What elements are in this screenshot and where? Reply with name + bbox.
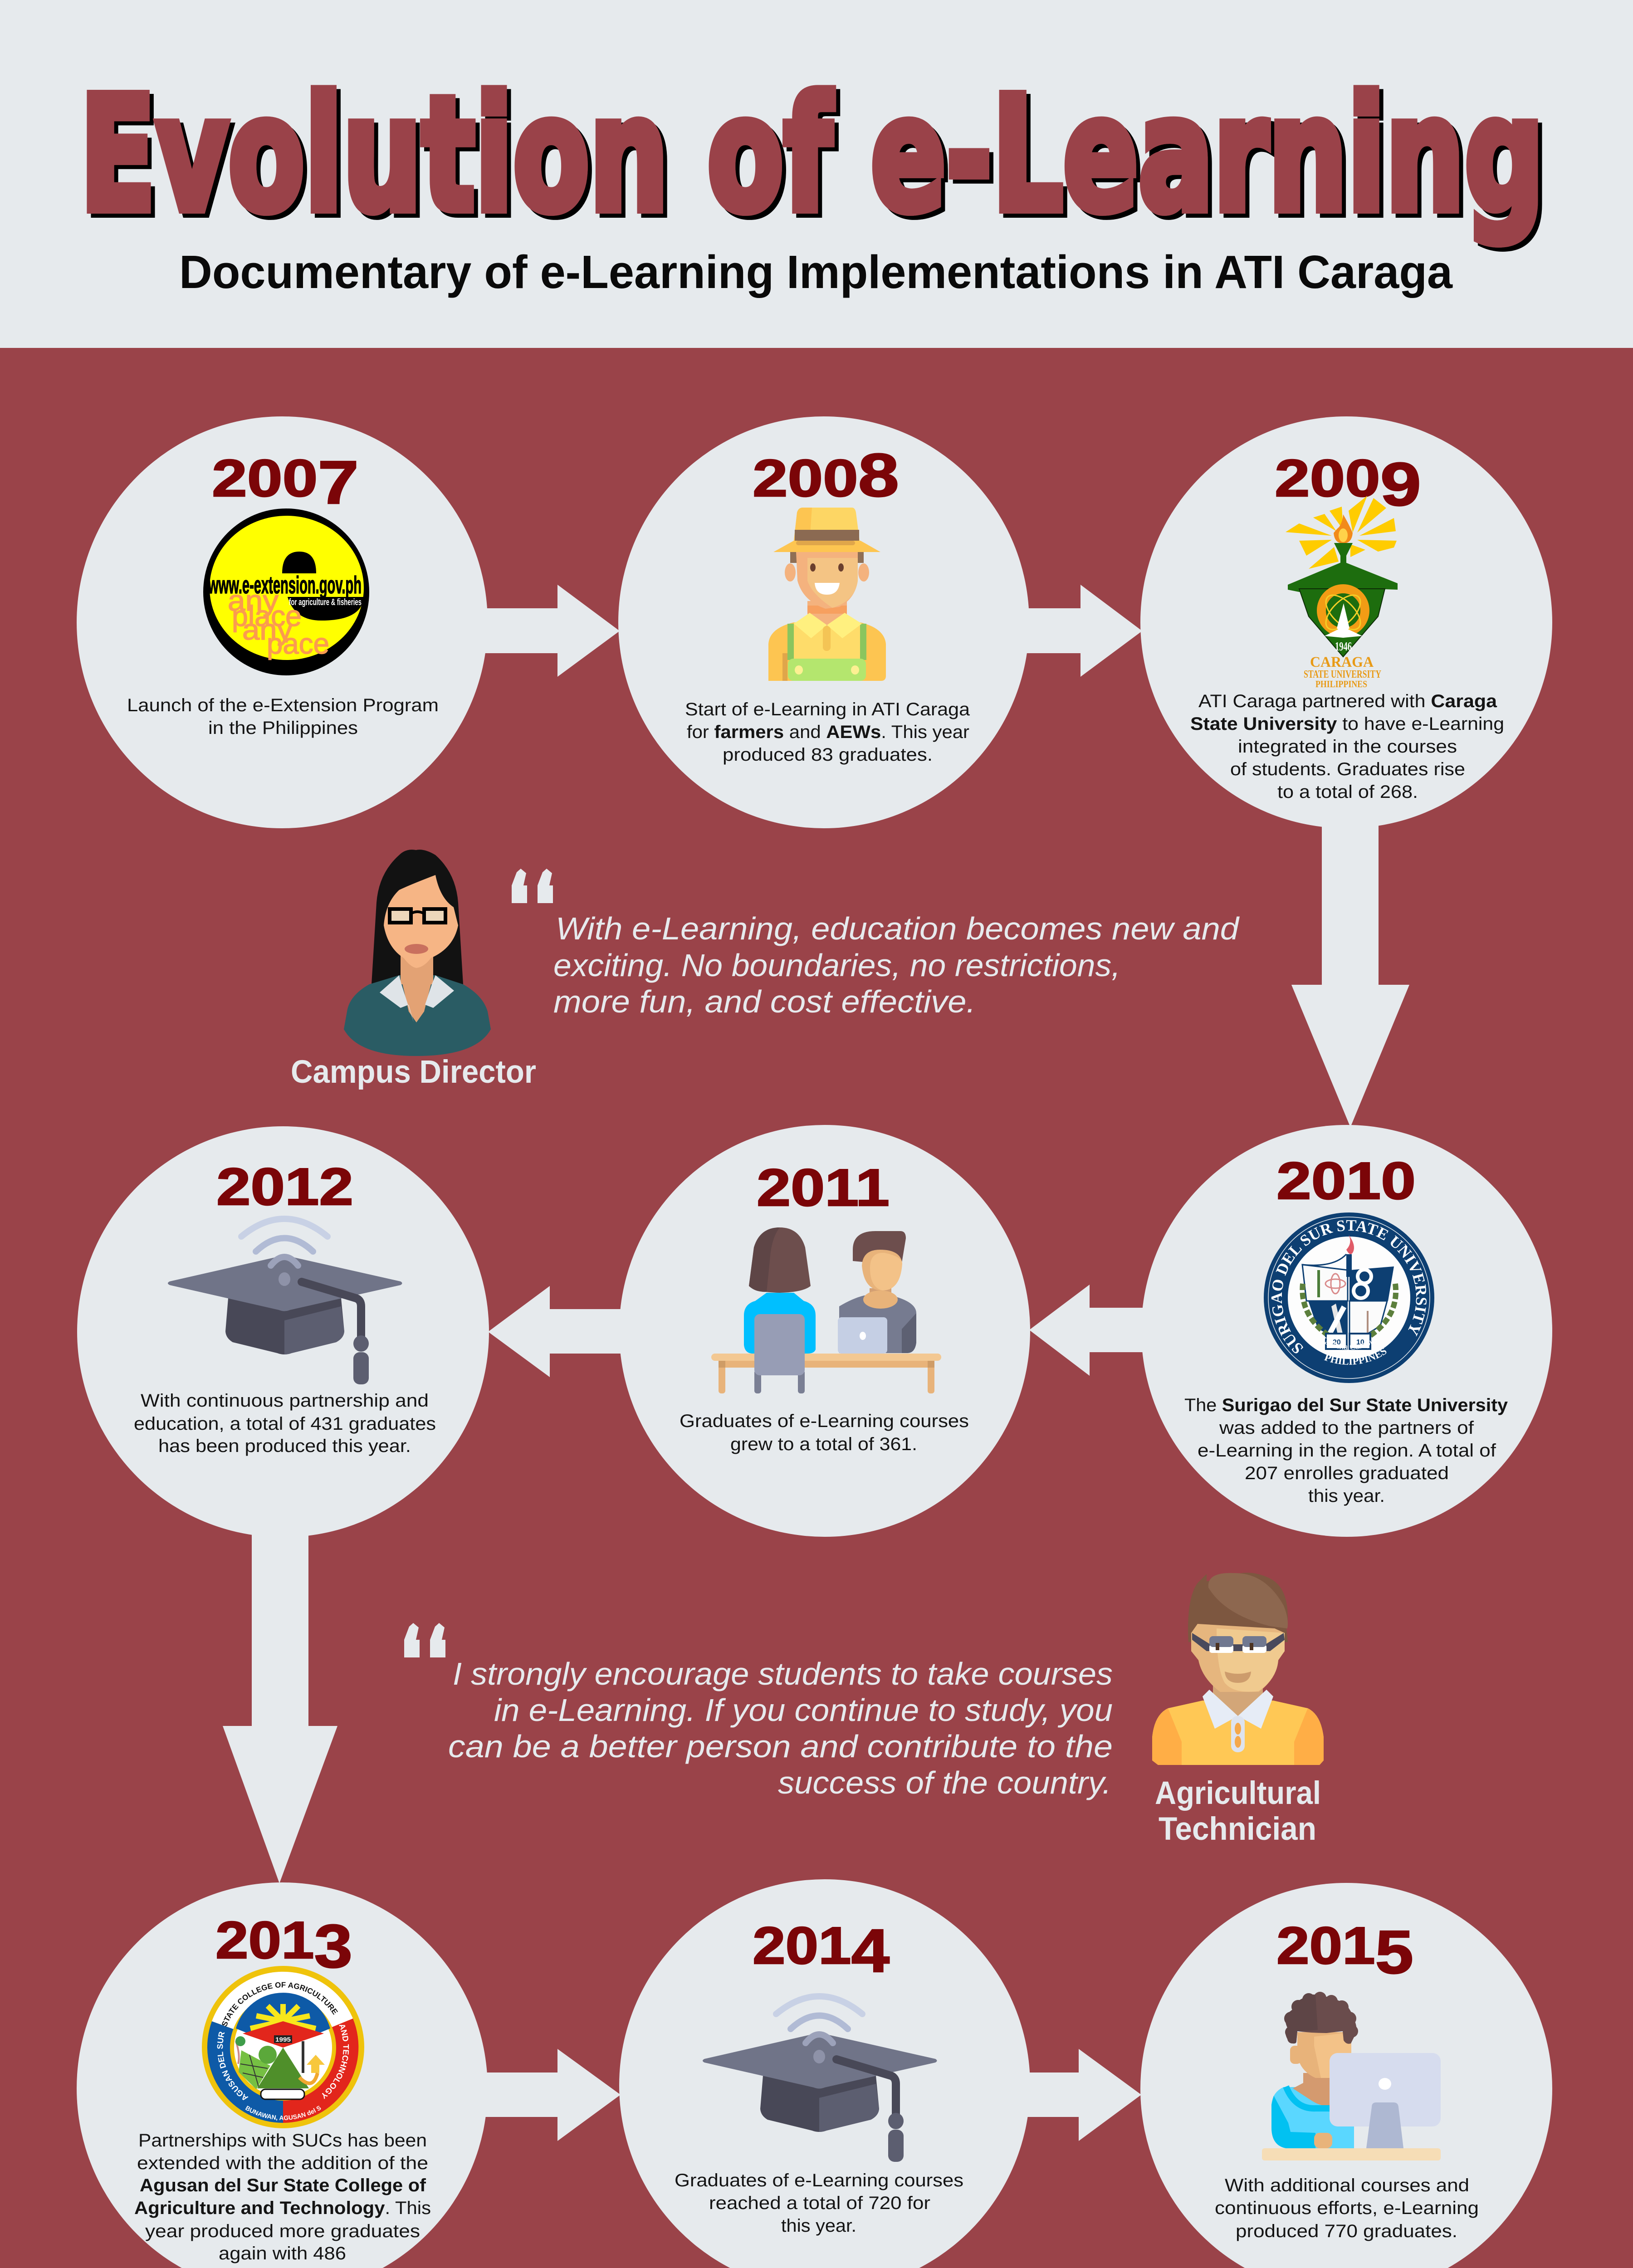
text: 2007: in the Philippines: [208, 718, 358, 738]
text: 2011: grew to a total of 361.: [730, 1434, 917, 1454]
icon: campus director: [344, 850, 491, 1056]
text: 2008: Start of e-Learning in ATI Caraga: [685, 699, 970, 719]
icon: Caraga State University logo: STATE UNIVERSITY: [1304, 669, 1381, 680]
year 2008: 200 8: [753, 441, 899, 509]
year 2009: 200: [1275, 449, 1363, 508]
text: 2014: [675, 2170, 963, 2236]
icon: e-Extension logo: place: [232, 600, 302, 632]
icon: person at computer: [1262, 1992, 1441, 2160]
year 2010: 2010: [1276, 1151, 1416, 1210]
text: 2010: [1184, 1395, 1508, 1506]
text: 2009: ATI Caraga partnered with Caraga: [1198, 691, 1497, 711]
panel: 2011: [619, 1125, 1030, 1537]
quote text: in e-Learning. If you continue to study, you: [494, 1692, 1113, 1728]
panel: 2009: [1140, 416, 1552, 828]
arrow: 2009 to 2010: [1291, 816, 1409, 1127]
icon: Caraga State University logo: [1286, 496, 1398, 689]
year 2009: 9: [1380, 450, 1421, 518]
panel: 2013: [0, 0, 488, 2268]
icon: e-Extension logo: pace: [267, 627, 329, 660]
icon: Surigao del Sur State University seal: SURIGAO DEL SUR STATE UNIVERSITY: [1268, 1217, 1430, 1358]
arrow: 2013 to 2014: [481, 2049, 621, 2141]
text: 2012: education, a total of 431 graduates: [134, 1414, 436, 1434]
text: 2011: Graduates of e-Learning courses: [680, 1411, 969, 1431]
testimonial: Campus Director: [291, 850, 1240, 1090]
icon: ASSCAT seal: BUNAWAN, AGUSAN del SUR: [0, 0, 323, 2121]
label: Agricultural Technician: Technician: [1159, 1811, 1316, 1847]
panel: 2012: [77, 1126, 489, 1537]
text: 2015: With additional courses and: [1225, 2175, 1469, 2195]
testimonial: Agricultural Technician: [404, 1573, 1324, 1847]
text: 2009: integrated in the courses: [1238, 737, 1457, 757]
icon: graduation cap: [703, 1996, 937, 2162]
text: 2014: Graduates of e-Learning courses: [675, 2170, 963, 2190]
icon: e-Extension logo: [203, 508, 369, 675]
year 2011: 2011: [757, 1158, 890, 1217]
icon: Caraga State University logo: 1946: [1335, 640, 1352, 653]
icon: e-Extension logo: for agriculture & fisheries: [289, 597, 362, 607]
icon: Surigao del Sur State University seal: Tagbina Campus: [1319, 1334, 1379, 1352]
panel: 2014: [619, 1879, 1030, 2268]
text: 2007: Launch of the e-Extension Program: [127, 695, 439, 715]
quote text: more fun, and cost effective.: [553, 984, 976, 1019]
icon: Surigao del Sur State University seal: PHILIPPINES: [1323, 1345, 1389, 1367]
icon: farmer: [768, 508, 886, 681]
arrow: 2011 to 2012: [488, 1286, 626, 1377]
quote text: exciting. No boundaries, no restrictions,: [553, 948, 1120, 983]
year 2014: 201: [753, 1916, 841, 1975]
icon: Surigao del Sur State University seal: 10: [1356, 1339, 1364, 1346]
year 2013: 3: [314, 1912, 352, 1980]
text: 2015: produced 770 graduates.: [1236, 2221, 1457, 2241]
text: 2008: for farmers and AEWs. This year: [687, 722, 969, 742]
text: 2012: [134, 1391, 436, 1456]
quotation mark: [512, 869, 553, 903]
text: 2015: continuous efforts, e-Learning: [1215, 2198, 1479, 2218]
arrow: 2007 to 2008: [481, 585, 620, 677]
year 2015: 5: [1375, 1918, 1413, 1986]
panel: 2007: [77, 416, 488, 828]
label: Campus Director: Campus Director: [291, 1054, 536, 1090]
text: 2008: produced 83 graduates.: [723, 745, 933, 765]
text: 2014: reached a total of 720 for: [709, 2193, 930, 2213]
icon: ASSCAT seal: AGUSAN DEL SUR: [215, 2031, 249, 2103]
year 2015: 201: [1276, 1916, 1364, 1975]
text: 2013: again with 486: [219, 2244, 346, 2263]
text: 2012: With continuous partnership and: [141, 1391, 429, 1411]
header: title and subtitle: [80, 63, 1544, 298]
text: 2009: State University to have e-Learning: [1190, 714, 1504, 734]
text: 2009: to a total of 268.: [1277, 782, 1418, 802]
text: 2015: [1215, 2175, 1479, 2241]
panel: 2010: [1141, 1125, 1552, 1537]
icon: e-Extension logo: any: [228, 584, 279, 617]
arrow: 2012 to 2013: [223, 1529, 337, 1883]
icon: e-Extension logo: any: [242, 613, 293, 646]
label: Agricultural Technician: [1155, 1775, 1321, 1847]
text: 2009: [1190, 691, 1504, 802]
quote text: [553, 911, 1240, 1019]
quote text: [448, 1656, 1113, 1800]
panel: 2008: [618, 416, 1029, 828]
text: 2009: of students. Graduates rise: [1230, 759, 1465, 779]
year 2007: 7: [318, 448, 359, 517]
text: 2013: Partnerships with SUCs has been: [138, 2131, 427, 2151]
text: 2011: [680, 1411, 969, 1454]
icon: Surigao del Sur State University seal: 20: [1333, 1339, 1341, 1346]
arrow: 2014 to 2015: [1021, 2049, 1141, 2141]
icon: ASSCAT seal: AND TECHNOLOGY: [319, 2023, 351, 2101]
arrow: 2008 to 2009: [1021, 585, 1142, 677]
text: 2010: e-Learning in the region. A total of: [1198, 1441, 1496, 1461]
text: 2008: [685, 699, 970, 765]
icon: e-Extension logo: www.e-extension.gov.ph: [208, 572, 362, 599]
quote text: I strongly encourage students to take courses: [453, 1656, 1113, 1691]
text: 2012: has been produced this year.: [158, 1436, 411, 1456]
icon: ASSCAT seal: 1995: [275, 2036, 291, 2043]
year 2007: 200: [212, 449, 300, 508]
text: 2010: 207 enrolles graduated: [1245, 1463, 1449, 1483]
text: 2007: [127, 695, 439, 738]
text: 2010: The Surigao del Sur State University: [1184, 1395, 1508, 1415]
year 2012: 2012: [216, 1157, 353, 1216]
icon: students at desk: [711, 1227, 941, 1393]
text: 2013: [134, 2131, 431, 2263]
text: 2013: Agusan del Sur State College of: [140, 2175, 426, 2195]
text: 2010: this year.: [1308, 1486, 1385, 1506]
icon: Caraga State University logo: CARAGA: [1310, 654, 1374, 670]
text: 2013: Agriculture and Technology . This: [134, 2198, 431, 2218]
quote text: With e-Learning, education becomes new and: [556, 911, 1240, 946]
quote text: success of the country.: [778, 1765, 1111, 1800]
icon: Caraga State University logo: PHILIPPINES: [1315, 679, 1367, 689]
text: 2013: extended with the addition of the: [137, 2153, 428, 2173]
icon: agricultural technician: [1152, 1573, 1324, 1765]
panel: 2015: [1140, 1883, 1552, 2268]
arrow: 2010 to 2011: [1029, 1285, 1148, 1376]
subtitle: Documentary of e-Learning Implementations in ATI Caraga: [179, 246, 1453, 298]
icon: ASSCAT seal: STATE COLLEGE OF AGRICULTURE: [220, 1980, 339, 2028]
quotation mark: [404, 1623, 445, 1657]
icon: graduation cap: [168, 1219, 402, 1384]
text: 2013: year produced more graduates: [145, 2221, 420, 2241]
quote text: can be a better person and contribute to the: [448, 1729, 1113, 1764]
year 2013: 201: [215, 1911, 303, 1970]
label: Agricultural Technician: Agricultural: [1155, 1775, 1321, 1811]
text: 2010: was added to the partners of: [1219, 1418, 1474, 1438]
year 2014: 4: [851, 1916, 890, 1985]
text: 2014: this year.: [781, 2216, 856, 2236]
